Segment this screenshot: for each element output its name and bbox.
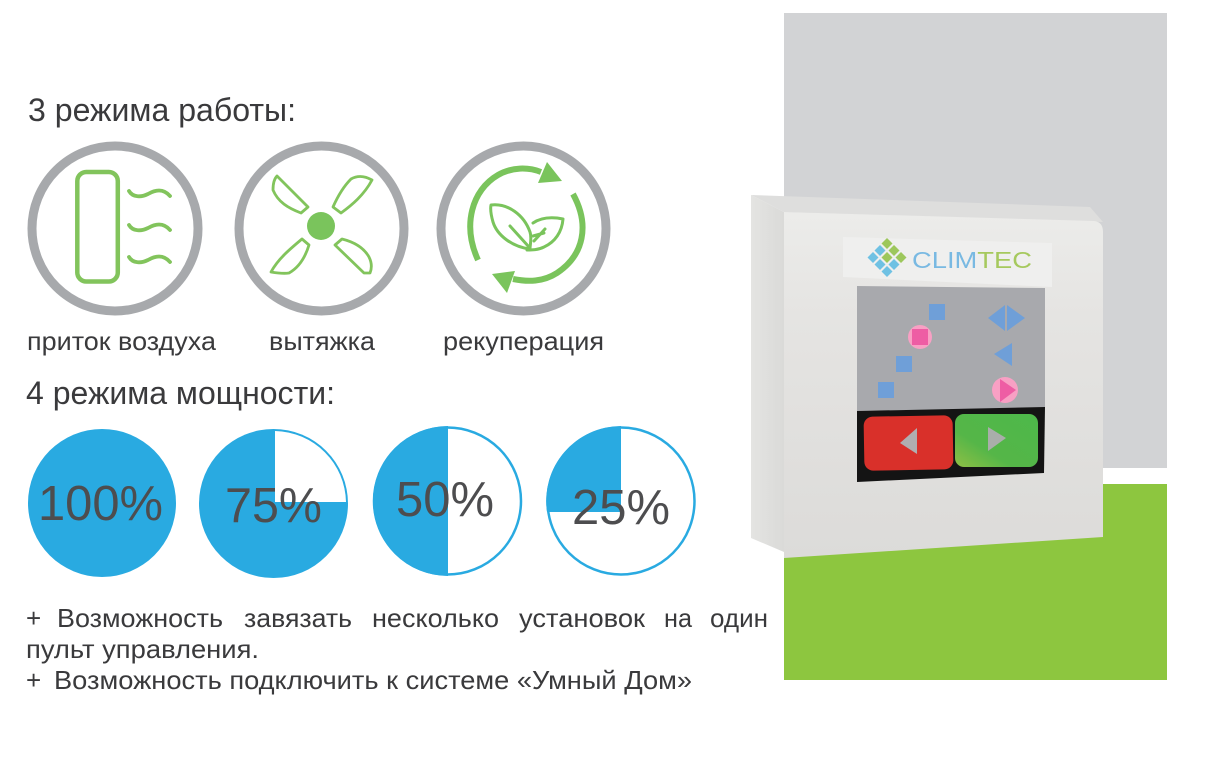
chart: 25% bbox=[546, 426, 694, 574]
text block: notes: несколько bbox=[372, 603, 499, 633]
label: recuperation: рекуперация bbox=[443, 326, 604, 356]
device front face bbox=[784, 212, 1103, 558]
text block: notes: Возможность подключить к системе «Умный Дом» bbox=[54, 665, 692, 695]
heading: 3 operating modes: 3 режима работы: bbox=[28, 92, 296, 128]
brand label: CLIM TEC bbox=[912, 247, 1032, 273]
speed indicators bbox=[878, 304, 945, 398]
chart: 100%: 100% bbox=[38, 477, 163, 531]
chart: 25%: 25% bbox=[572, 481, 670, 535]
icon: exhaust fan bbox=[239, 146, 404, 311]
chart: 50% bbox=[373, 426, 521, 576]
icon: air supply bbox=[32, 146, 198, 311]
text block: notes: завязать bbox=[244, 603, 352, 633]
device top face bbox=[751, 195, 1103, 222]
device: control panel bbox=[751, 195, 1103, 558]
button bar bbox=[857, 407, 1045, 482]
chart: 100% bbox=[28, 429, 176, 577]
display screen bbox=[857, 286, 1045, 411]
icon: recuperation bbox=[441, 146, 606, 311]
panel: green background bbox=[784, 484, 1167, 680]
red button bbox=[864, 415, 953, 471]
panel: gray background bbox=[784, 13, 1167, 468]
mode indicators bbox=[988, 305, 1025, 403]
chart: 50%: 50% bbox=[396, 473, 494, 527]
chart: 75%: 75% bbox=[225, 479, 322, 533]
text block: notes bbox=[26, 603, 768, 695]
chart: 75% bbox=[199, 429, 348, 578]
text block: notes: на bbox=[664, 603, 693, 633]
text block: notes: Возможность bbox=[57, 603, 223, 633]
text block: notes: + bbox=[26, 603, 41, 633]
brand label bbox=[843, 237, 1052, 287]
green button bbox=[955, 414, 1038, 467]
text block: notes: установок bbox=[519, 603, 646, 633]
text block: notes: один bbox=[710, 603, 768, 633]
text block: notes: + bbox=[26, 665, 41, 695]
text block: notes: пульт управления. bbox=[26, 634, 259, 664]
label: air supply: приток воздуха bbox=[27, 326, 217, 356]
device side face bbox=[751, 195, 784, 552]
label: exhaust: вытяжка bbox=[269, 326, 376, 356]
heading: 4 power modes: 4 режима мощности: bbox=[26, 375, 335, 411]
